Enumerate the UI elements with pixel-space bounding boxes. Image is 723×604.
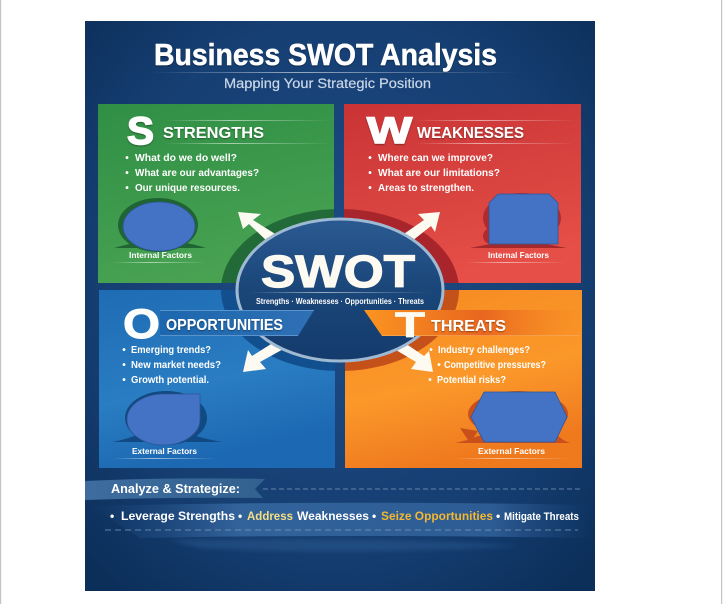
arrow: to weaknesses bbox=[398, 212, 440, 245]
opportunities ribbon and heading: OPPORTUNITIES bbox=[166, 317, 283, 334]
weaknesses label bbox=[466, 250, 566, 263]
opportunities bullets: • bbox=[122, 360, 126, 371]
opportunities bullets: New market needs? bbox=[131, 360, 221, 371]
panel: strengths bbox=[98, 104, 334, 283]
threats bullets: • bbox=[437, 360, 441, 371]
arrows bbox=[238, 212, 440, 372]
weaknesses bullets bbox=[368, 153, 500, 194]
arrow: to threats bbox=[391, 339, 433, 372]
weaknesses bullets: Areas to strengthen. bbox=[378, 183, 474, 194]
action list: • bbox=[238, 509, 242, 523]
strengths bullets: What do we do well? bbox=[135, 153, 237, 164]
SWOT wordmark: SWOT bbox=[261, 246, 415, 297]
icon: threats hexagon bbox=[455, 391, 570, 443]
threats ribbon and heading: THREATS bbox=[431, 318, 506, 335]
strengths bullets: Our unique resources. bbox=[135, 183, 240, 194]
threats label: External Factors bbox=[478, 446, 545, 456]
threats bullets bbox=[428, 345, 546, 386]
action list: • bbox=[372, 509, 376, 523]
weaknesses label: Internal Factors bbox=[488, 250, 549, 260]
opportunities label: External Factors bbox=[132, 446, 197, 456]
threats ribbon and heading bbox=[364, 306, 580, 345]
strengths heading bbox=[127, 110, 264, 153]
panel: weaknesses bbox=[344, 104, 581, 283]
threats bullets: • bbox=[428, 375, 432, 386]
strengths bullets: What are our advantages? bbox=[135, 168, 259, 179]
strengths label bbox=[112, 250, 207, 263]
action list: Leverage Strengths bbox=[121, 509, 235, 523]
action list: Seize Opportunities bbox=[381, 509, 493, 523]
weaknesses bullets: • bbox=[368, 153, 372, 164]
weaknesses heading: W bbox=[367, 110, 412, 151]
strengths bullets: • bbox=[125, 168, 129, 179]
weaknesses bullets: • bbox=[368, 183, 372, 194]
opportunities bullets: Growth potential. bbox=[131, 375, 209, 386]
weaknesses bullets: What are our limitations? bbox=[378, 168, 500, 179]
threats bullets: Competitive pressures? bbox=[444, 360, 546, 371]
icon: opportunities teardrop bbox=[112, 391, 222, 445]
banner: analyze and strategize bbox=[85, 478, 581, 500]
threats label bbox=[455, 446, 570, 459]
threats bullets: • bbox=[429, 345, 433, 356]
panel: opportunities bbox=[99, 290, 335, 468]
action list: Address bbox=[247, 509, 293, 523]
arrow: to strengths bbox=[238, 212, 280, 244]
strengths bullets: • bbox=[125, 153, 129, 164]
action list: Weaknesses bbox=[297, 509, 369, 523]
action list: Mitigate Threats bbox=[504, 511, 579, 523]
strengths halo bbox=[222, 209, 334, 283]
strengths heading: S bbox=[127, 110, 154, 153]
weaknesses heading bbox=[367, 110, 524, 151]
icon: weaknesses block bbox=[470, 193, 567, 248]
panel: threats bbox=[345, 290, 582, 468]
strengths heading: STRENGTHS bbox=[163, 125, 264, 142]
weaknesses bullets: Where can we improve? bbox=[378, 153, 493, 164]
opportunities bullets: Emerging trends? bbox=[131, 345, 211, 356]
arrow: to opportunities bbox=[243, 339, 287, 372]
opportunities bullets bbox=[122, 345, 221, 386]
opportunities bullets: • bbox=[122, 375, 126, 386]
icon: strengths circle bbox=[114, 198, 206, 252]
opportunities bullets: • bbox=[122, 345, 126, 356]
title: Business SWOT Analysis bbox=[154, 37, 497, 72]
action band bbox=[90, 503, 592, 552]
banner: analyze and strategize: Analyze & Strategize: bbox=[111, 481, 240, 496]
poster background bbox=[85, 21, 595, 591]
subtitle: Mapping Your Strategic Position bbox=[224, 76, 431, 91]
strengths bullets: • bbox=[125, 183, 129, 194]
strengths label: Internal Factors bbox=[129, 250, 192, 260]
threats bullets: Potential risks? bbox=[437, 375, 506, 386]
weaknesses halo bbox=[344, 209, 458, 283]
SWOT subline: Strengths · Weaknesses · Opportunities · Threats bbox=[256, 296, 424, 306]
opportunities ribbon and heading: O bbox=[123, 300, 160, 347]
opportunities halo bbox=[221, 290, 335, 371]
action list bbox=[110, 509, 579, 523]
threats halo bbox=[345, 290, 459, 371]
center ellipse bbox=[237, 219, 443, 361]
action list: • bbox=[110, 509, 114, 523]
threats ribbon and heading: T bbox=[395, 306, 425, 345]
weaknesses bullets: • bbox=[368, 168, 372, 179]
threats bullets: Industry challenges? bbox=[438, 345, 530, 356]
opportunities label bbox=[112, 446, 217, 459]
action list: • bbox=[496, 509, 500, 523]
strengths bullets bbox=[125, 153, 259, 194]
weaknesses heading: WEAKNESSES bbox=[417, 125, 524, 142]
opportunities ribbon and heading bbox=[123, 300, 314, 347]
